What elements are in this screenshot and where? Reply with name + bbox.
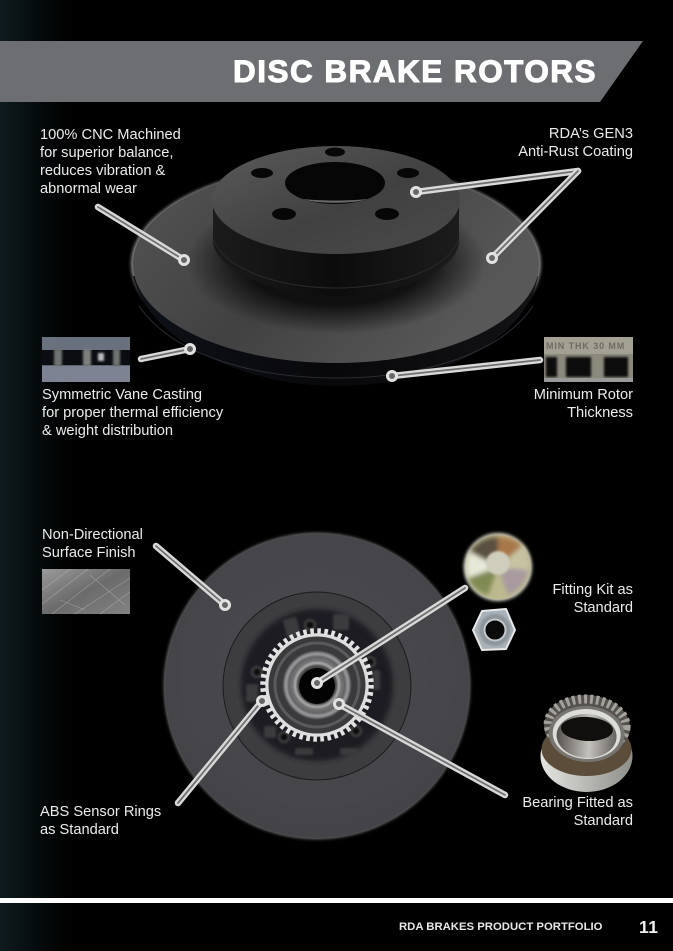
- thumbnail: surface finish: [42, 569, 130, 614]
- text: vane casting: for proper thermal efficiency: [42, 405, 223, 421]
- arrow: coating to face: [488, 171, 578, 262]
- text: surface finish: Non-Directional: [42, 527, 143, 543]
- text: minimum rotor thickness: [534, 387, 633, 421]
- washer: [464, 533, 532, 601]
- arrow: coating to hat: [412, 171, 578, 196]
- arrow: minimum thickness: [388, 360, 540, 380]
- arrow: bearing: [334, 700, 505, 795]
- arrow: ABS ring: [178, 696, 266, 803]
- text: ABS rings: ABS Sensor Rings: [40, 804, 161, 820]
- ABS sensor ring: [263, 631, 371, 739]
- text: bearing fitted: Bearing Fitted as: [522, 795, 633, 811]
- text: CNC machined: reduces vibration &: [40, 163, 165, 179]
- text: vane casting: [42, 387, 224, 439]
- text: bearing fitted: [522, 795, 633, 829]
- top rotor: [131, 146, 541, 386]
- hub bolts: [252, 620, 375, 742]
- bolt holes: [251, 148, 419, 220]
- hub and bearing: [268, 636, 366, 734]
- text: fitting kit: Standard: [574, 600, 633, 616]
- text: anti-rust coating: RDA’s GEN3: [549, 126, 633, 142]
- arrow: surface finish: [156, 546, 230, 610]
- arrow: CNC machined: [98, 207, 188, 264]
- center bore: [285, 162, 385, 204]
- text: CNC machined: for superior balance,: [40, 145, 173, 161]
- text: surface finish: [42, 527, 143, 561]
- text: CNC machined: 100% CNC Machined: [40, 127, 181, 143]
- arrow: vane casting: [141, 344, 194, 359]
- arrow: fitting kit: [312, 588, 465, 688]
- text: anti-rust coating: [518, 126, 633, 160]
- text: ABS rings: [40, 804, 161, 838]
- bearing: [540, 693, 632, 792]
- bottom rotor: [164, 533, 470, 839]
- footer rule: [0, 898, 673, 903]
- text: minimum rotor thickness: Minimum Rotor: [534, 387, 633, 403]
- callout arrows: [98, 171, 578, 803]
- title band: [0, 41, 643, 102]
- thumbnail: vane casting: [42, 337, 130, 382]
- text: minimum rotor thickness: Thickness: [567, 405, 633, 421]
- stamped text: MIN THK 30 MM: [546, 341, 625, 351]
- text: fitting kit: [552, 582, 633, 616]
- text: surface finish: Surface Finish: [42, 545, 136, 561]
- text: CNC machined: abnormal wear: [40, 181, 137, 197]
- text: anti-rust coating: Anti-Rust Coating: [518, 144, 633, 160]
- thumbnail: minimum thickness: [544, 337, 633, 382]
- background left glow: [0, 0, 70, 951]
- text: vane casting: & weight distribution: [42, 423, 173, 439]
- text: CNC machined: [40, 127, 181, 197]
- text: fitting kit: Fitting Kit as: [552, 582, 633, 598]
- text: vane casting: Symmetric Vane Casting: [42, 387, 202, 403]
- text: bearing fitted: Standard: [574, 813, 633, 829]
- nut: [473, 609, 515, 650]
- footer label: RDA BRAKES PRODUCT PORTFOLIO: [399, 921, 602, 933]
- title: DISC BRAKE ROTORS: [233, 53, 597, 89]
- page number: 11: [639, 917, 658, 937]
- text: ABS rings: as Standard: [40, 822, 119, 838]
